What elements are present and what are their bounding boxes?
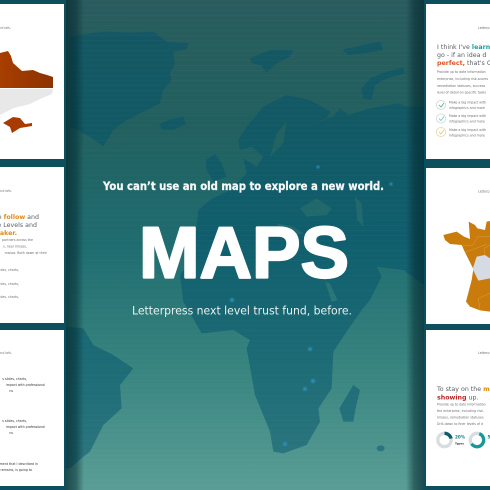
list item text: Make a big impact with xyxy=(449,114,486,118)
title: MAPS xyxy=(139,214,349,294)
heading: go - if an idea d xyxy=(437,52,486,59)
list item text: Make a big impact with xyxy=(449,128,486,132)
body text: s, near misses, xyxy=(3,244,27,248)
body text: the enterprise, including risk- xyxy=(437,409,484,413)
body text: partners across the xyxy=(2,238,33,242)
map: crimea xyxy=(3,117,32,133)
body text: des, charts, xyxy=(0,268,19,272)
donut chart: 20% types xyxy=(438,433,451,447)
iceland xyxy=(159,117,186,130)
panel: left bottom card xyxy=(0,330,64,486)
body text xyxy=(437,70,488,94)
list item text: Make a big impact with xyxy=(449,100,486,104)
body text: ns xyxy=(9,389,13,393)
body text: des, charts, xyxy=(0,295,19,299)
greenland xyxy=(70,32,188,147)
list item text: infographics and more xyxy=(449,106,485,110)
region borders xyxy=(463,237,490,310)
world map xyxy=(63,32,427,468)
body text: ment that I described in xyxy=(0,462,38,466)
svalbard xyxy=(250,50,293,73)
britain xyxy=(206,154,227,182)
heading: aker. xyxy=(0,230,17,237)
body text: remediation statuses, success xyxy=(437,84,485,88)
donut label: 20%: 20% xyxy=(455,434,466,440)
map location dots xyxy=(230,166,392,446)
body text: manos. Both down at their xyxy=(5,251,48,255)
tagline: You can’t use an old map to explore a new world. xyxy=(102,179,384,193)
region: centre xyxy=(473,255,490,281)
body text xyxy=(0,238,48,299)
body text: Provide up to date information xyxy=(437,402,486,406)
icon: check ring green xyxy=(436,100,446,110)
donut chart: second xyxy=(468,431,486,449)
franz josef land xyxy=(343,42,383,55)
panel: left middle card xyxy=(0,167,64,323)
body text: s slides, charts, xyxy=(2,419,27,423)
heading xyxy=(0,214,39,237)
card caption: Letterp xyxy=(478,26,489,30)
madagascar xyxy=(339,385,360,422)
panel: right top card xyxy=(426,4,490,159)
icon: check ring teal xyxy=(436,114,446,123)
heading: I think I've learn xyxy=(437,44,490,51)
body text: misses, remediation statuses xyxy=(437,416,484,420)
card caption: Letterp xyxy=(478,190,489,194)
body text: remains, is going to xyxy=(0,468,32,472)
body text: ns xyxy=(9,431,13,435)
eurasia and africa xyxy=(180,95,427,453)
heading: showing up. xyxy=(437,394,479,402)
list item text xyxy=(449,128,486,138)
panel: right middle card xyxy=(426,168,490,324)
heading: To stay on the m xyxy=(436,386,490,393)
list item text xyxy=(449,100,486,110)
body text: Provide up to date information xyxy=(437,70,486,74)
heading xyxy=(437,44,490,67)
small island xyxy=(377,445,385,451)
body text: Drill-down to finer levels of d xyxy=(437,422,483,426)
card caption: Letterp xyxy=(478,351,489,355)
body text: impact with professional xyxy=(6,383,45,387)
south america xyxy=(63,327,133,468)
list item text: infographics and more xyxy=(449,134,485,138)
map: france xyxy=(443,221,490,312)
body text: level of detail on specific tasks xyxy=(437,90,486,94)
background texture xyxy=(66,0,424,490)
body text: impact with professional xyxy=(6,425,45,429)
body text: des, charts, xyxy=(0,282,19,286)
map: region upper xyxy=(0,51,53,88)
body text xyxy=(437,402,486,426)
list item text xyxy=(449,114,486,124)
subtitle: Letterpress next level trust fund, before. xyxy=(132,304,352,318)
donut label: 20% xyxy=(455,434,466,446)
body text: enterprise, including risk-scores xyxy=(437,77,488,81)
body text: s slides, charts, xyxy=(2,377,27,381)
icon: check ring yellow xyxy=(436,127,446,137)
novaya zemlya xyxy=(362,68,405,100)
list item text: infographics and more xyxy=(449,120,485,124)
side shadows xyxy=(66,0,424,490)
panel: left top card xyxy=(0,4,64,159)
panel: right bottom card xyxy=(426,330,490,486)
donut label: 20%: Types xyxy=(455,442,464,446)
body text xyxy=(0,377,45,472)
map: region lower xyxy=(0,89,53,115)
heading xyxy=(436,386,490,402)
